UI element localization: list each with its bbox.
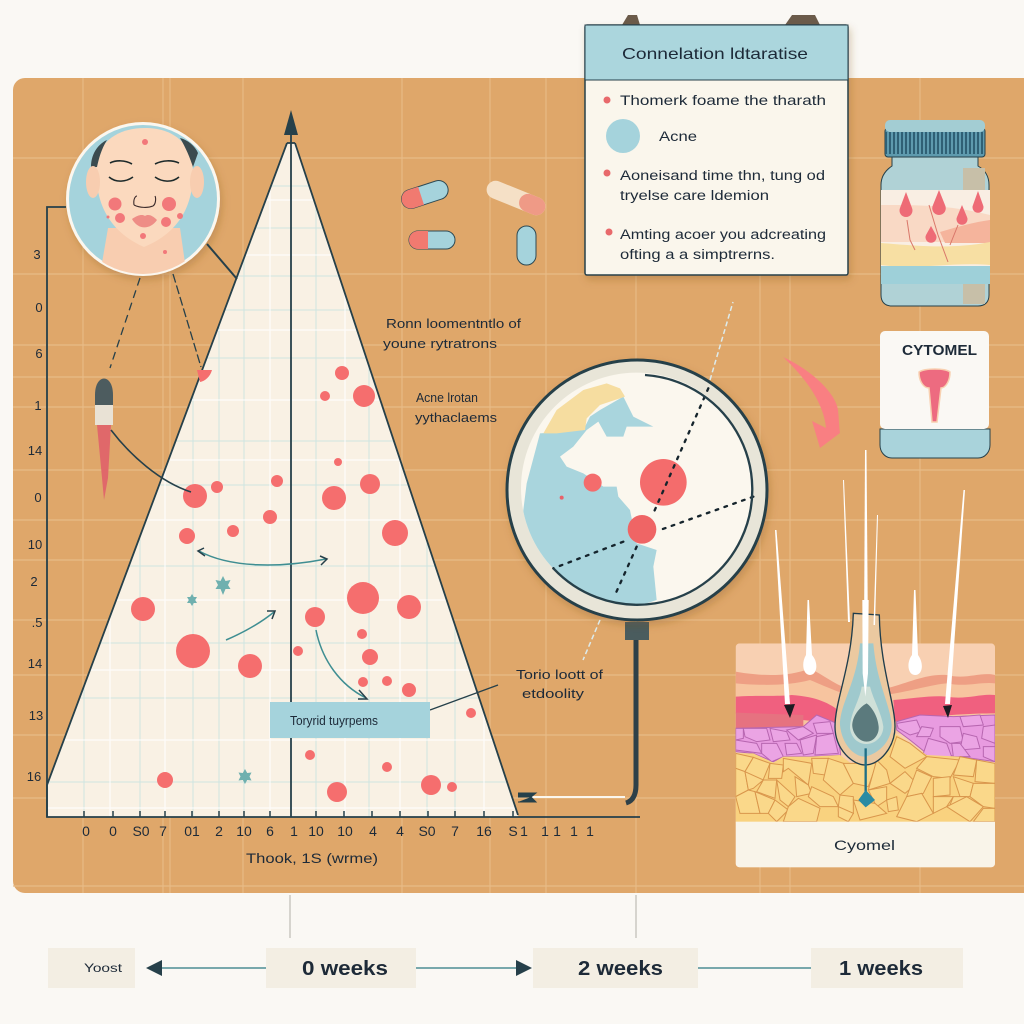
magnifying glass <box>507 302 767 803</box>
thyroid icon <box>919 369 950 422</box>
lens inner ring <box>553 375 752 605</box>
stage: yoost: Yoost <box>84 961 123 975</box>
face portrait medallion <box>66 122 220 290</box>
legend: acne: Acne <box>659 128 697 144</box>
pills <box>399 178 548 265</box>
annotation: middle: Acne lrotan <box>416 391 478 405</box>
dermis bands <box>736 668 995 733</box>
timeline connector stems <box>290 895 636 938</box>
x axis labels <box>82 823 594 839</box>
annotation: lower: Torio loott of <box>516 668 604 682</box>
annotation: middle <box>415 391 497 425</box>
y axis labels: 3 <box>33 247 41 262</box>
capsule bottom right <box>517 226 536 265</box>
x axis labels: 0 <box>109 823 117 839</box>
bullet two: Aoneisand time thn, tung od <box>620 168 825 183</box>
y axis labels: 0 <box>35 300 43 315</box>
annotation: top: youne rytratrons <box>383 337 497 351</box>
x axis labels: 7 <box>159 823 167 839</box>
caption strip <box>736 822 995 867</box>
x axis labels: 10 <box>337 823 353 839</box>
bullet three: ofting a a simptrerns. <box>620 247 775 262</box>
swab applicator <box>95 378 191 500</box>
x axis labels: 6 <box>266 823 274 839</box>
y axis labels: 6 <box>35 346 43 361</box>
bullet two <box>604 168 825 203</box>
bullet one: Thomerk foame the tharath <box>620 92 826 108</box>
bottle cap <box>885 128 985 157</box>
triangle outline <box>47 143 518 817</box>
hair follicle <box>835 600 895 807</box>
lens contents <box>520 373 753 613</box>
annotation leader line <box>430 685 498 710</box>
panel: correlation callout <box>585 25 848 275</box>
stage: 1 weeks: 1 weeks <box>839 958 923 980</box>
annotation: middle: yythaclaems <box>415 411 497 425</box>
bullet three <box>606 227 826 262</box>
x axis labels: 1 <box>553 823 561 839</box>
x axis labels: 0 <box>82 823 90 839</box>
dashed extensions <box>583 302 733 660</box>
callout header <box>585 25 848 80</box>
teal star markers <box>187 576 252 784</box>
y axis labels: 14 <box>28 443 42 458</box>
thyroid symptoms label: Toryrid tuyrpems <box>290 714 378 728</box>
stage: yoost <box>48 948 135 988</box>
x axis labels: S0 <box>132 823 150 839</box>
acne spots on face <box>106 139 183 254</box>
x axis labels: 16 <box>476 823 492 839</box>
annotation: lower <box>516 668 604 701</box>
lens dotted crosshairs <box>553 388 753 595</box>
skin cross section <box>736 600 995 867</box>
x axis labels: 1 <box>541 823 549 839</box>
red marker at triangle edge <box>197 370 212 382</box>
white needles and droplets <box>775 450 965 718</box>
panel: tan chart board <box>13 78 1024 893</box>
callout tabs <box>622 15 820 25</box>
x axis labels: 10 <box>236 823 252 839</box>
y axis labels: 10 <box>28 537 42 552</box>
timeline arrow lines <box>150 967 811 969</box>
cytomel bottle: CYTOMEL <box>902 343 977 359</box>
x axis labels: 1 <box>520 823 528 839</box>
x axis labels: 10 <box>308 823 324 839</box>
timeline <box>48 948 963 988</box>
x axis labels: 01 <box>184 823 200 839</box>
y axis labels: 14 <box>28 656 42 671</box>
bullet three: Amting acoer you adcreating <box>620 227 826 242</box>
y axis labels: 13 <box>29 708 43 723</box>
stage: 1 weeks <box>811 948 963 988</box>
y axis line <box>47 207 640 817</box>
y axis labels: 1 <box>34 398 42 413</box>
closed eyes and brows <box>109 161 179 181</box>
stage: 0 weeks: 0 weeks <box>302 958 388 980</box>
vertical axis with arrowhead <box>284 110 298 817</box>
stage: 2 weeks: 2 weeks <box>578 958 663 980</box>
y axis labels: 16 <box>27 769 41 784</box>
acne data points <box>131 366 476 802</box>
annotation: lower: etdoolity <box>522 687 585 701</box>
bullet two: tryelse care ldemion <box>620 188 769 203</box>
stage: 2 weeks <box>533 948 698 988</box>
x axis labels: 7 <box>451 823 459 839</box>
x axis labels: 4 <box>369 823 377 839</box>
lips <box>132 215 157 227</box>
x axis labels: 1 <box>586 823 594 839</box>
yellow fat cell layer <box>736 733 995 823</box>
annotation: top: Ronn loomentntlo of <box>386 317 522 331</box>
y axis labels: 2 <box>30 574 38 589</box>
x axis labels: 1 <box>290 823 298 839</box>
triangle chart <box>0 110 640 820</box>
bottom connector from chart to handle <box>518 793 625 802</box>
annotation: top <box>383 317 522 351</box>
cytomel bottle <box>880 331 990 458</box>
x axis title: Thook, 1S (wrme) <box>246 850 378 866</box>
x axis labels: 2 <box>215 823 223 839</box>
bottle label <box>881 190 990 284</box>
capsule bottom left <box>409 231 455 249</box>
connector lines from face <box>110 244 237 368</box>
droplets on label <box>899 190 984 243</box>
x axis labels: S0 <box>418 823 436 839</box>
capsule top right <box>484 178 548 218</box>
pill bottle with illustration <box>881 120 990 306</box>
legend: acne <box>606 119 697 153</box>
capsule top left <box>399 178 451 211</box>
y axis labels: 0 <box>34 490 42 505</box>
x axis labels: 1 <box>570 823 578 839</box>
x axis labels: 4 <box>396 823 404 839</box>
handle <box>625 622 649 803</box>
stage: 0 weeks <box>266 948 416 988</box>
bottle body <box>881 157 989 306</box>
teal trend arrows <box>198 548 367 699</box>
y axis labels: .5 <box>32 615 42 630</box>
thyroid symptoms label <box>270 702 430 738</box>
x axis labels: S <box>508 823 518 839</box>
y axis labels <box>27 247 43 784</box>
purple cell layer <box>736 715 995 762</box>
lens spots <box>560 459 687 544</box>
panel: correlation callout: Connelation ldtaratise <box>622 46 808 63</box>
curved coral arrow <box>783 357 840 448</box>
triangle fill <box>47 143 518 817</box>
caption: Cyomel <box>834 837 895 853</box>
x axis ticks <box>84 811 513 817</box>
